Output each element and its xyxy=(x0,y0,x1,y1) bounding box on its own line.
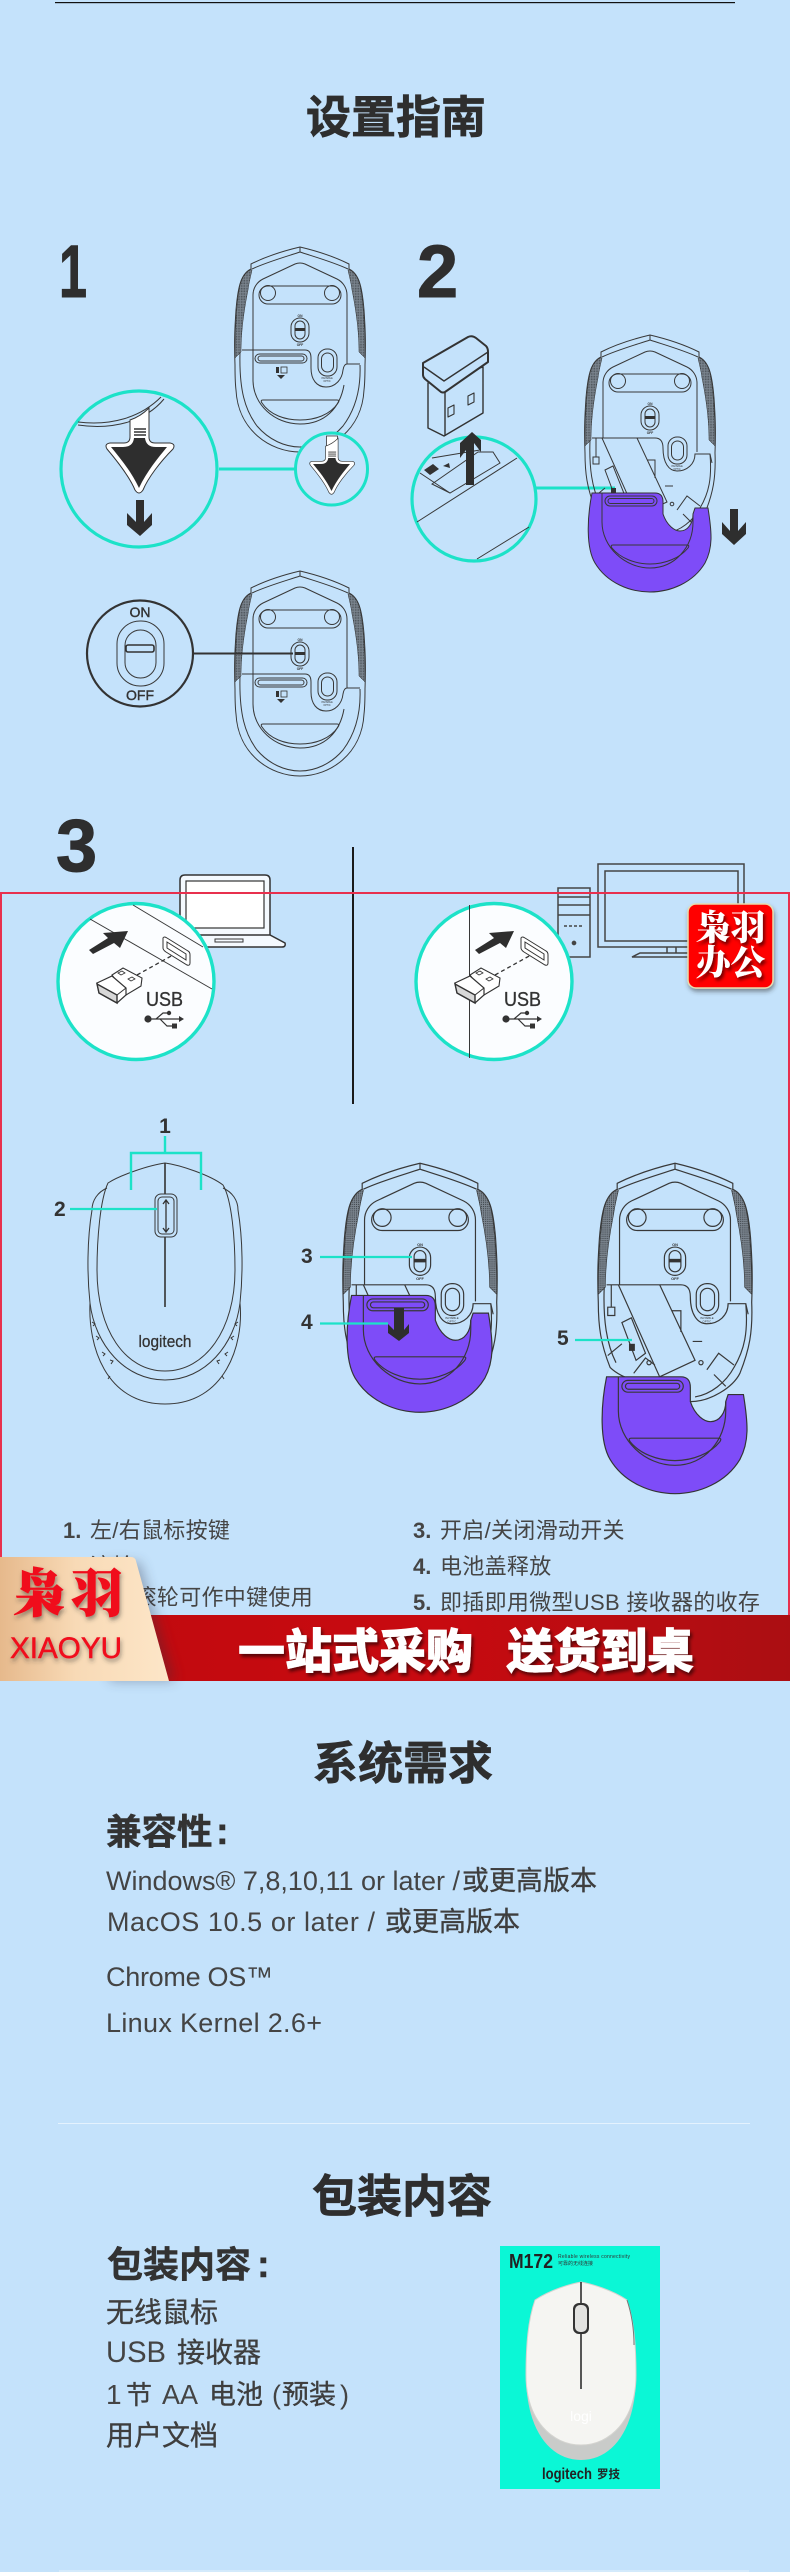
subheading: package contents: : xyxy=(257,2244,270,2286)
sticker: quanyu office xyxy=(688,901,773,988)
step 3: desktop monitor xyxy=(598,864,744,957)
step 1: mouse underside with pull tab xyxy=(235,247,365,452)
step 2: open mouse with purple cover: OFF xyxy=(647,431,653,435)
sticker: quanyu office: 公 xyxy=(730,936,766,986)
overview: mouse with cover removed: OFF xyxy=(671,1276,680,1281)
sticker: quanyu office: 羽 xyxy=(730,901,766,951)
sticker: quanyu office: 枭 xyxy=(695,901,731,951)
step 1: mouse underside with pull tab: OFF xyxy=(297,343,303,347)
brand tag xyxy=(0,1552,175,1681)
step 2 number: 2 xyxy=(417,230,458,313)
callout 2: scroll wheel xyxy=(54,1198,157,1221)
callout 5: receiver storage xyxy=(557,1327,632,1350)
feature list right: 5. xyxy=(413,1590,431,1615)
step 2: magnified receiver slot circle xyxy=(412,432,536,561)
step 1: ON/OFF switch callout xyxy=(87,600,293,706)
product box: M172: logitech xyxy=(542,2466,592,2483)
feature list right: 即插即用微型USB 接收器的收存 xyxy=(440,1590,760,1615)
overview: mouse with cover removed: INVISIBLE xyxy=(700,1316,714,1320)
overview: mouse with cover closed: INVISIBLE xyxy=(445,1316,459,1320)
package contents list: AA xyxy=(162,2379,198,2410)
step 1: mouse underside with pull tab: INVISIBLE xyxy=(321,377,333,380)
step 1: ON/OFF switch callout: ON xyxy=(130,604,150,620)
feature list right: 3. xyxy=(413,1518,431,1543)
package contents list: 预装 xyxy=(282,2380,336,2410)
step 3: laptop USB circle: USB xyxy=(146,989,183,1011)
brand tag: 枭 xyxy=(13,1552,65,1627)
step 2: USB receiver dongle xyxy=(423,336,488,436)
overview: top view mouse: logitech xyxy=(138,1332,192,1351)
overview: mouse with cover closed: OPTIC xyxy=(448,1320,456,1324)
overview: top view mouse xyxy=(88,1163,242,1404)
callout 1: buttons bracket: 1 xyxy=(159,1115,171,1138)
brand tag: 羽 xyxy=(71,1552,123,1627)
product box: M172: logi xyxy=(570,2408,592,2424)
feature list left: 中间滚轮可作中键使用 xyxy=(90,1585,313,1610)
step 1: mouse underside with pull tab: ON xyxy=(298,314,303,318)
sticker: quanyu office: 办 xyxy=(695,936,734,986)
step 1 number: 1 xyxy=(59,230,87,313)
step 1: power switch mouse xyxy=(235,571,365,776)
product box: M172: 可靠的无线连接 xyxy=(558,2260,593,2267)
step 3 number: 3 xyxy=(56,804,97,887)
package contents list: USB xyxy=(106,2336,166,2369)
compatibility list: MacOS 10.5 or later / xyxy=(107,1907,375,1937)
step 1: power switch mouse: INVISIBLE xyxy=(321,701,333,704)
callout 2: scroll wheel: 2 xyxy=(54,1198,66,1221)
compatibility list xyxy=(106,1866,597,2038)
product box: M172: M172 xyxy=(509,2251,553,2273)
compatibility list: Chrome OS™ xyxy=(106,1962,273,1992)
red promo banner: 一站式采购 xyxy=(238,1625,473,1678)
divider xyxy=(58,2123,750,2124)
heading: package contents: 包装内容 xyxy=(312,2171,492,2222)
step 2: open mouse with purple cover xyxy=(585,335,715,592)
feature list right: 4. xyxy=(413,1554,431,1579)
subheading: package contents: 包装内容 xyxy=(107,2244,251,2285)
step 3: PC tower xyxy=(558,888,590,957)
red promo banner xyxy=(0,1615,790,1681)
step 1: ON/OFF switch callout: OFF xyxy=(126,687,154,703)
step 3: desktop USB circle: USB xyxy=(504,989,541,1011)
compatibility list: Linux Kernel 2.6+ xyxy=(106,2008,322,2038)
callout 1: buttons bracket xyxy=(131,1115,201,1190)
subheading: compatibility: : xyxy=(216,1811,229,1853)
overview: mouse with cover closed xyxy=(343,1163,497,1412)
heading: system requirements: 系统需求 xyxy=(313,1738,493,1789)
product box: M172: 罗技 xyxy=(597,2467,620,2481)
title: setup guide: 设置指南 xyxy=(306,92,486,143)
step 2: open mouse with purple cover: OPTIC xyxy=(673,468,681,471)
callout 3: power switch: 3 xyxy=(301,1245,313,1268)
step 1: magnified pull tab circle xyxy=(61,391,217,547)
subheading: compatibility: 兼容性 xyxy=(106,1812,213,1852)
feature list left: 滚轮 xyxy=(90,1554,135,1579)
callout 3: power switch xyxy=(301,1245,412,1268)
package contents list: 节 xyxy=(126,2380,152,2410)
overview: mouse with cover closed: OFF xyxy=(416,1276,425,1281)
step 2: down arrow xyxy=(722,509,746,545)
package contents list: 无线鼠标 xyxy=(106,2297,218,2328)
package contents list: 接收器 xyxy=(177,2337,261,2368)
brand tag: XIAOYU xyxy=(10,1632,122,1665)
package contents list xyxy=(106,2297,349,2451)
callout 4: cover release: 4 xyxy=(301,1311,313,1334)
compatibility list: 或更高版本 xyxy=(385,1907,520,1937)
feature list left: 2. xyxy=(63,1554,81,1579)
feature list left: 左/右鼠标按键 xyxy=(90,1518,230,1543)
overview: mouse with cover closed: ON xyxy=(417,1242,423,1247)
bottom divider xyxy=(59,2570,749,2572)
red frame overlay xyxy=(1,893,789,1625)
package contents list: ) xyxy=(340,2380,349,2410)
step 1: mouse underside with pull tab: OPTIC xyxy=(323,380,331,383)
feature list right: 电池盖释放 xyxy=(440,1554,552,1579)
package contents list: 1 xyxy=(106,2379,122,2410)
step 2: open mouse with purple cover: INVISIBLE xyxy=(671,465,683,468)
step 3: laptop USB circle xyxy=(58,904,214,1060)
overview: mouse with cover removed: ON xyxy=(672,1242,678,1247)
overview: mouse with cover removed xyxy=(598,1163,752,1494)
callout 5: receiver storage: 5 xyxy=(557,1327,569,1350)
feature list right: 开启/关闭滑动开关 xyxy=(440,1518,625,1543)
top rule xyxy=(55,2,735,3)
feature list right xyxy=(413,1518,760,1615)
product box: M172 xyxy=(500,2246,660,2489)
step 3: vertical divider xyxy=(352,847,354,1104)
step 1: power switch mouse: OPTIC xyxy=(323,704,331,707)
product box: M172: Reliable wireless connectivity xyxy=(558,2254,630,2260)
red promo banner: 送货到桌 xyxy=(506,1625,694,1678)
step 2: open mouse with purple cover: ON xyxy=(648,402,653,406)
callout 4: cover release xyxy=(301,1308,409,1341)
feature list left xyxy=(63,1518,313,1610)
step 3: laptop xyxy=(180,875,285,947)
compatibility list: 或更高版本 xyxy=(462,1866,597,1896)
package contents list: ( xyxy=(272,2380,281,2410)
step 1: small pull tab circle xyxy=(296,433,368,505)
compatibility list: Windows® 7,8,10,11 or later / xyxy=(106,1866,460,1896)
step 1: connector line between circles xyxy=(219,468,296,470)
step 1: power switch mouse: ON xyxy=(298,638,303,642)
package contents list: 电池 xyxy=(209,2380,263,2410)
package contents list: 用户文档 xyxy=(106,2420,218,2451)
step 3: desktop USB circle xyxy=(416,904,572,1060)
step 2: connector line xyxy=(536,486,615,490)
step 1: power switch mouse: OFF xyxy=(297,667,303,671)
feature list left: 1. xyxy=(63,1518,81,1543)
overview: mouse with cover removed: OPTIC xyxy=(703,1320,711,1324)
